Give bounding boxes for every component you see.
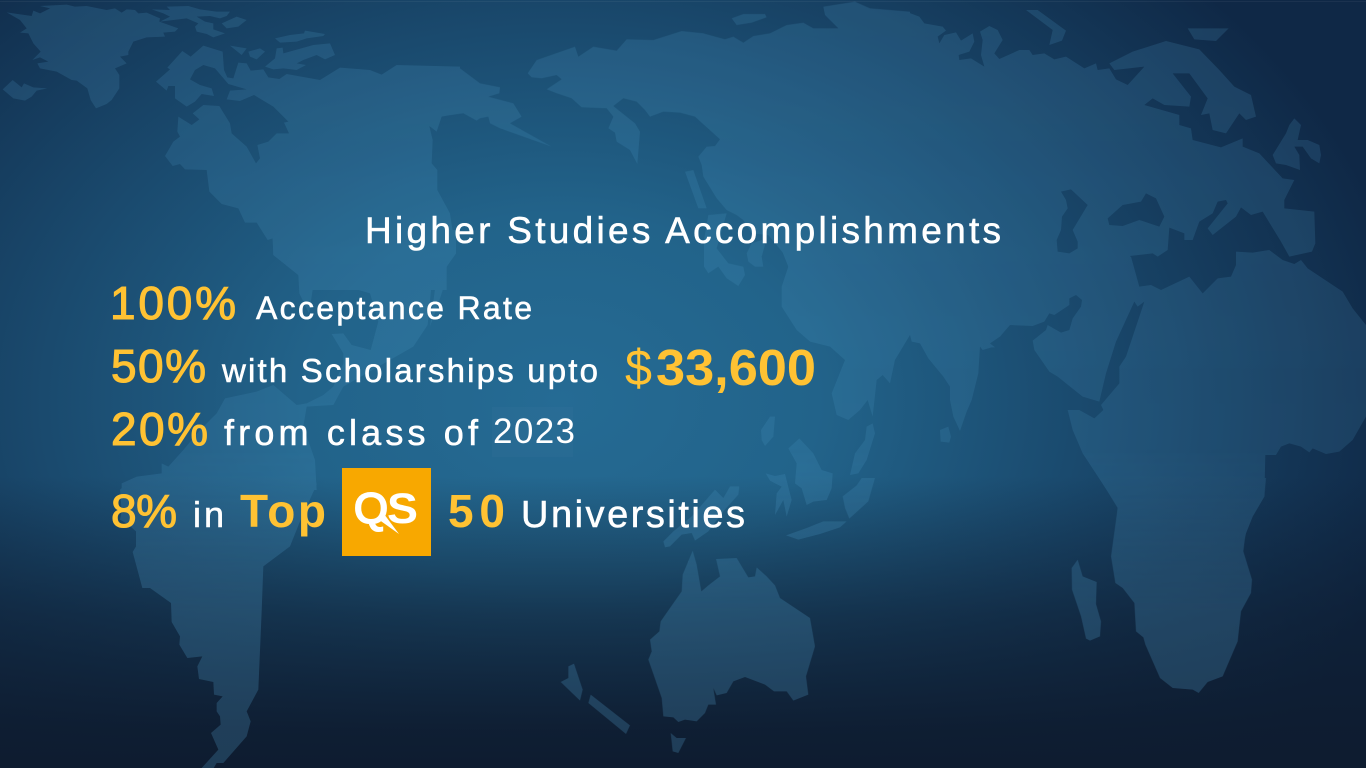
stats list [110,277,816,537]
stat row: scholarships: 33,600 [656,339,816,396]
stat row: scholarships [111,339,816,396]
stat row: acceptance rate [110,277,532,329]
stat row: top QS 50 universities [111,485,745,537]
stat row: top QS 50 universities: Universities [521,494,745,536]
stat row: top QS 50 universities: 50 [448,485,505,537]
stat row: acceptance rate: Acceptance Rate [256,290,532,326]
title: Higher Studies Accomplishments [365,210,1001,251]
stat row: scholarships: $ [625,339,652,396]
stat row: top QS 50 universities: in [193,494,224,535]
stat row: acceptance rate: 100% [110,277,236,329]
stat row: scholarships: with Scholarships upto [221,352,598,389]
QS logo badge [342,468,431,556]
stat row: class of 2023: 2023 [493,412,575,451]
stat row: scholarships: 50% [111,340,206,392]
stat row: class of 2023 [111,403,575,455]
QS logo badge: S [387,485,418,533]
stat row: top QS 50 universities: 8% [111,485,177,537]
stat row: class of 2023: from class of [224,412,479,453]
stat row: top QS 50 universities: Top [240,485,326,537]
QS logo badge: Q [354,485,388,533]
stat row: class of 2023: 20% [111,403,208,455]
